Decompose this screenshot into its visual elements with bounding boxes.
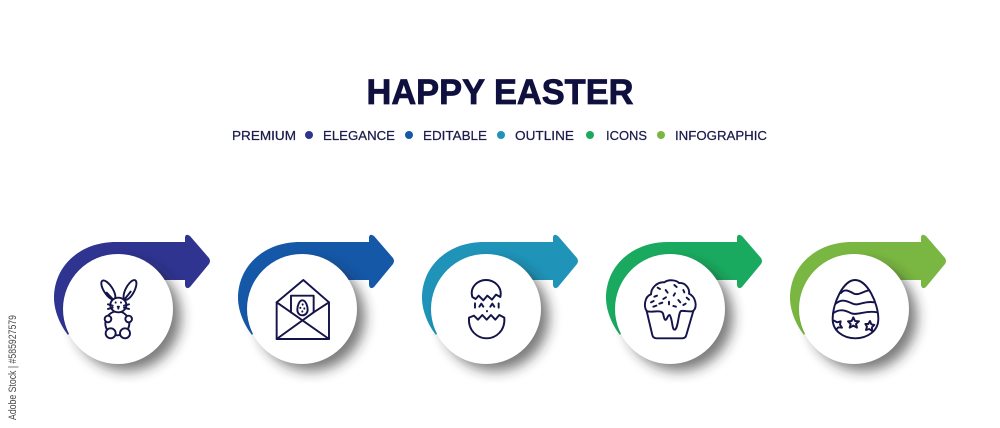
- icon: bunny: [99, 278, 139, 338]
- stock id side text: Adobe Stock | #585927579: [7, 315, 19, 420]
- arrow 4: [606, 235, 762, 335]
- legend row: ICONS: [606, 128, 647, 143]
- arrow 1: [54, 235, 210, 335]
- legend row: ELEGANCE: [323, 128, 395, 143]
- arrow 2: [238, 235, 394, 335]
- legend row: OUTLINE: [515, 128, 574, 143]
- legend row: INFOGRAPHIC: [675, 128, 767, 143]
- circle 2: [247, 254, 357, 364]
- circle 4: [615, 254, 725, 364]
- step 1: bunny: [54, 235, 210, 371]
- circle shadow 1: [73, 263, 181, 371]
- icon: decorated egg: [833, 280, 878, 338]
- circle 3: [431, 254, 541, 364]
- circle shadow 4: [625, 263, 733, 371]
- icon: envelope with egg card: [277, 280, 329, 339]
- icon: hatching egg: [469, 280, 504, 338]
- circle 1: [63, 254, 173, 364]
- step 5: decorated egg: [790, 235, 946, 371]
- title: HAPPY EASTER: [366, 73, 634, 112]
- circle shadow 5: [809, 263, 917, 371]
- step 2: envelope: [238, 235, 394, 371]
- circle shadow 2: [257, 263, 365, 371]
- circle 5: [799, 254, 909, 364]
- arrow 3: [422, 235, 578, 335]
- legend row: EDITABLE: [423, 128, 487, 143]
- step 3: hatching egg: [422, 235, 578, 371]
- legend row: PREMIUM: [232, 128, 296, 143]
- arrow 5: [790, 235, 946, 335]
- step 4: cupcake: [606, 235, 762, 371]
- legend row: [232, 128, 767, 143]
- icon: cupcake: [645, 280, 696, 338]
- circle shadow 3: [441, 263, 549, 371]
